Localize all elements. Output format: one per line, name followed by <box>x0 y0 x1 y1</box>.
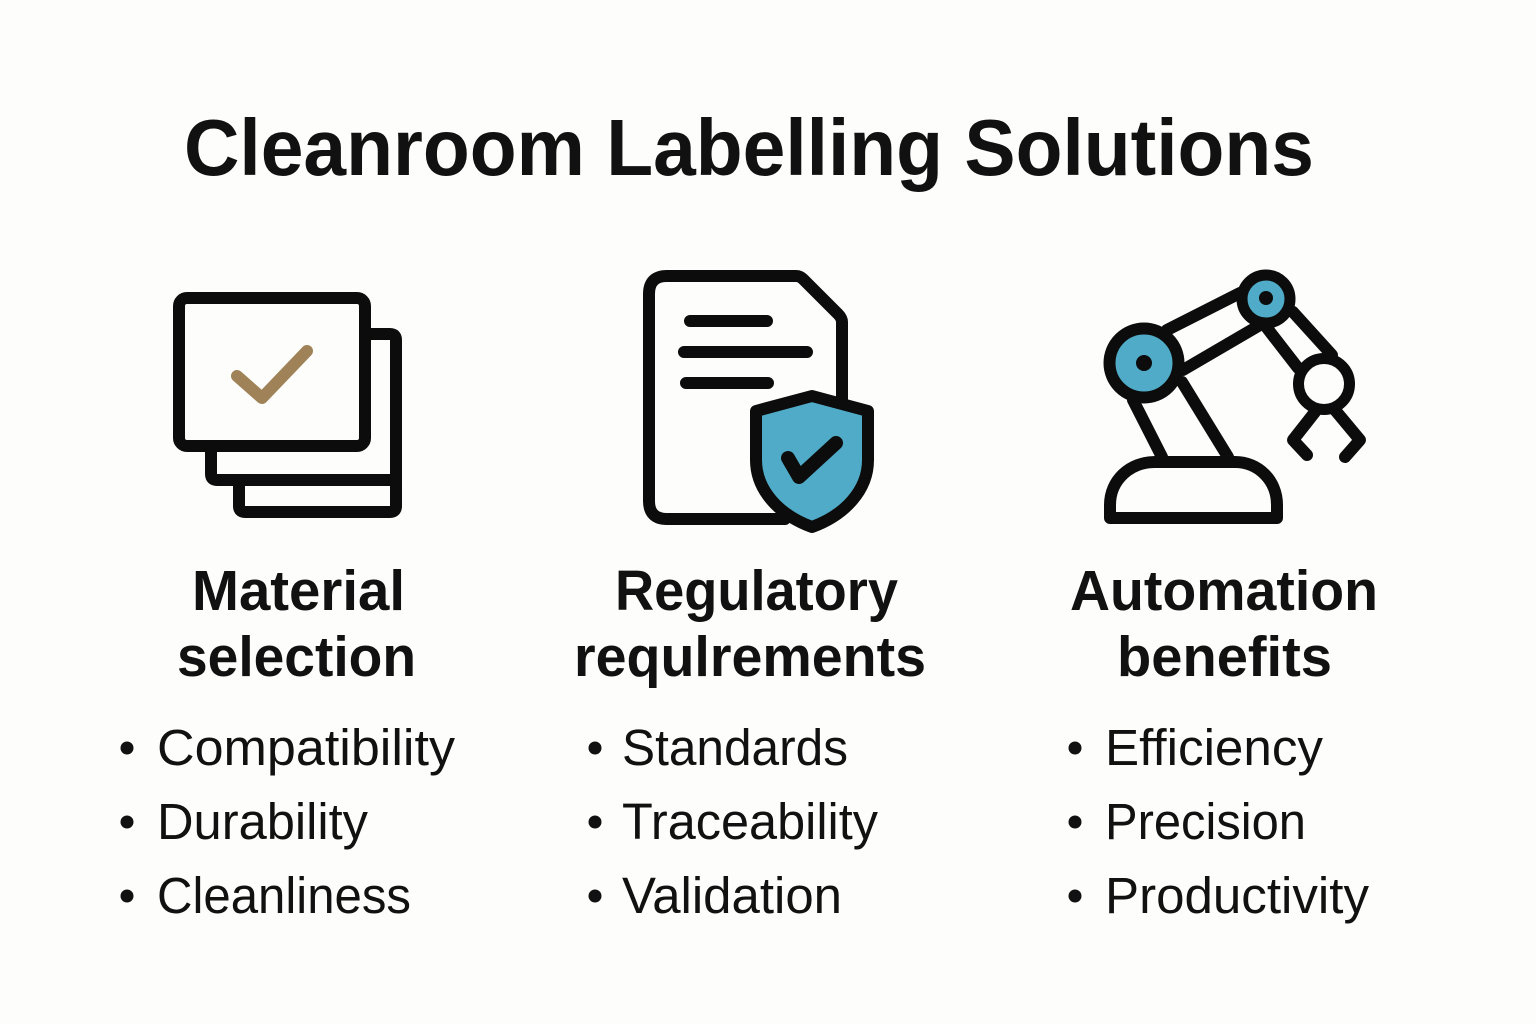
list: automation benefits bullets <box>1068 719 1369 924</box>
title: Cleanroom Labelling Solutions <box>184 103 1314 192</box>
heading: material selection: Material <box>192 559 405 623</box>
list: material selection bullets: Compatibility <box>157 719 456 776</box>
icon: stacked sheets with check <box>179 298 396 512</box>
list: regulatory requirements bullets: Traceability <box>622 793 878 850</box>
list: regulatory requirements bullets: Validation <box>622 867 842 924</box>
panel: material selection <box>120 298 456 924</box>
list: material selection bullets <box>120 719 456 924</box>
list: material selection bullets: Cleanliness <box>157 867 411 924</box>
list: automation benefits bullets: Precision <box>1105 793 1306 850</box>
list: automation benefits bullets: Productivity <box>1105 867 1369 924</box>
icon: document with shield <box>649 276 868 527</box>
list: material selection bullets: Durability <box>157 793 368 850</box>
heading: regulatory requirements: requlrements <box>574 625 926 689</box>
heading: automation benefits: Automation <box>1070 559 1378 623</box>
icon: robot arm <box>1110 275 1360 518</box>
heading: automation benefits: benefits <box>1117 625 1332 689</box>
panel: automation benefits <box>1068 275 1378 924</box>
heading: automation benefits <box>1070 559 1378 689</box>
heading: regulatory requirements: Regulatory <box>615 559 898 623</box>
list: automation benefits bullets: Efficiency <box>1105 719 1323 776</box>
heading: material selection: selection <box>177 625 416 689</box>
list: regulatory requirements bullets: Standards <box>622 719 848 776</box>
list: regulatory requirements bullets <box>588 719 878 924</box>
panel: regulatory requirements <box>574 276 926 924</box>
heading: material selection <box>177 559 416 689</box>
heading: regulatory requirements <box>574 559 926 689</box>
